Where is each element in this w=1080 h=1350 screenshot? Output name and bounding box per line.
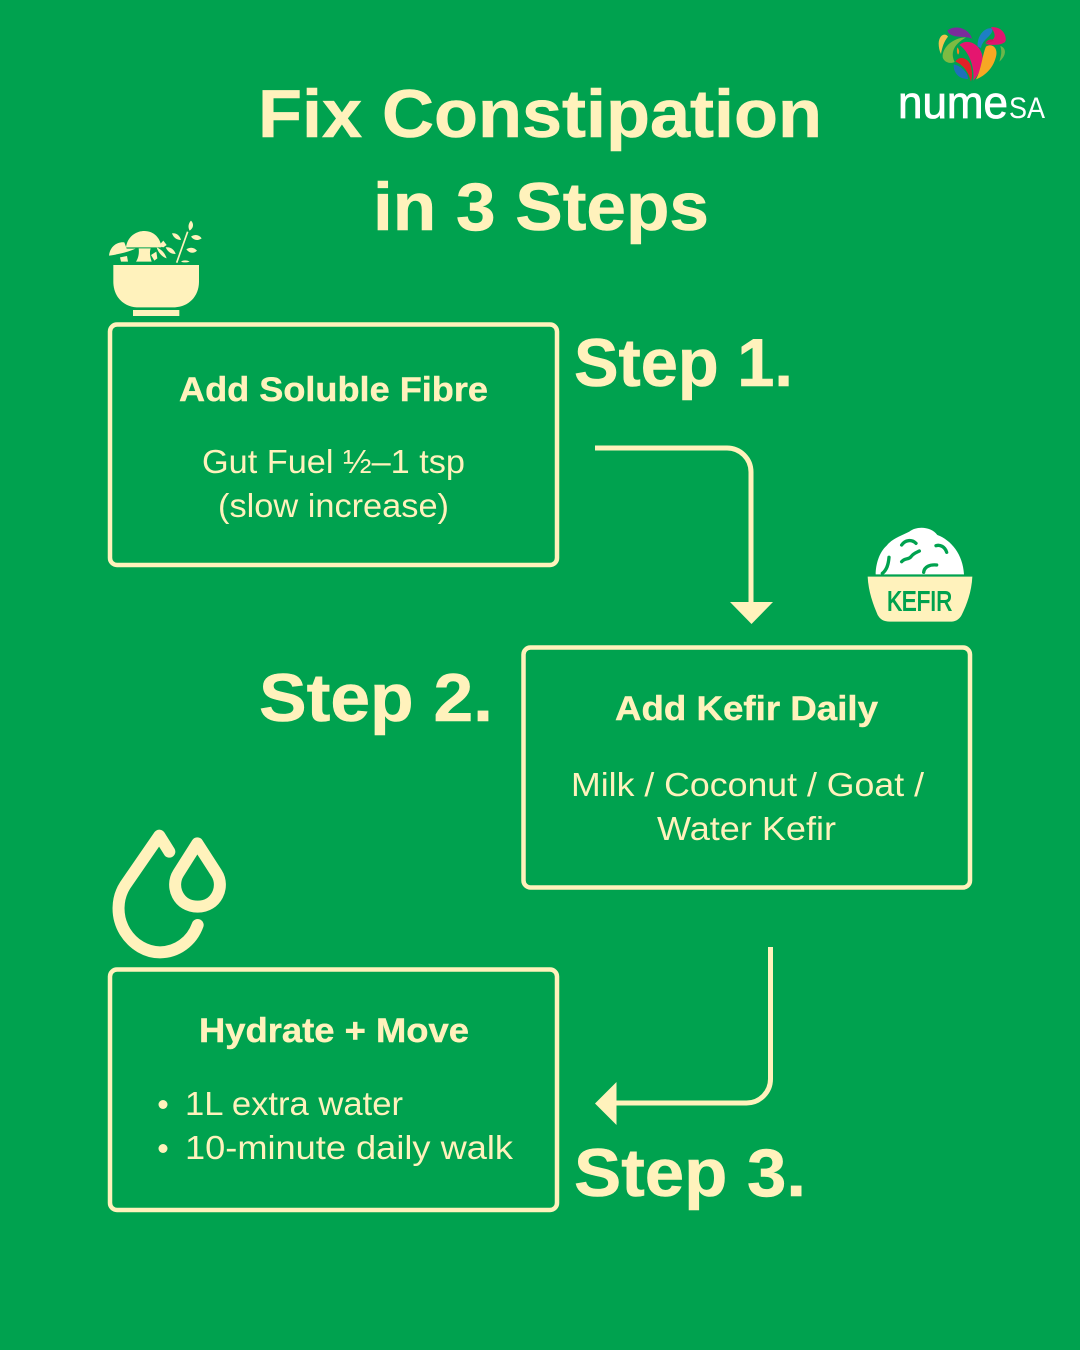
title: Fix Constipation <box>258 76 822 152</box>
step 3 bullet list: 1L extra water <box>185 1085 403 1122</box>
step 1 label: Step 1. <box>574 325 793 401</box>
title <box>258 76 822 245</box>
step 2 body <box>571 766 925 847</box>
step 2 body: Water Kefir <box>657 810 836 847</box>
step 3 label: Step 3. <box>574 1135 806 1211</box>
icon: kefir bowl <box>868 528 972 622</box>
step 1 body: (slow increase) <box>218 487 449 524</box>
logo wordmark: nume <box>898 77 1008 128</box>
panel: step 3 <box>110 970 557 1210</box>
icon: water drops <box>119 836 220 952</box>
panel: step 1 <box>110 324 557 565</box>
arrow: step 1 to step 2 <box>595 448 773 624</box>
icon: kefir bowl: KEFIR <box>887 585 952 616</box>
step 1 body: Gut Fuel ½–1 tsp <box>202 443 465 480</box>
step 1 heading: Add Soluble Fibre <box>179 371 488 409</box>
title: in 3 Steps <box>373 169 709 245</box>
panel: step 2 <box>524 648 970 888</box>
icon: bowl with mushrooms and herbs <box>109 221 202 316</box>
icon: logo heart <box>939 27 1006 82</box>
step 3 heading: Hydrate + Move <box>199 1012 469 1050</box>
logo wordmark: SA <box>1009 92 1045 125</box>
step 2 label: Step 2. <box>259 660 493 736</box>
step 3 bullet list: 10-minute daily walk <box>185 1129 514 1166</box>
step 2 body: Milk / Coconut / Goat / <box>571 766 925 803</box>
step 2 heading: Add Kefir Daily <box>615 690 878 728</box>
arrow: step 2 to step 3 <box>595 947 770 1125</box>
step 3 bullet list <box>158 1085 514 1166</box>
step 1 body <box>202 443 465 524</box>
logo: numesa <box>898 27 1045 128</box>
